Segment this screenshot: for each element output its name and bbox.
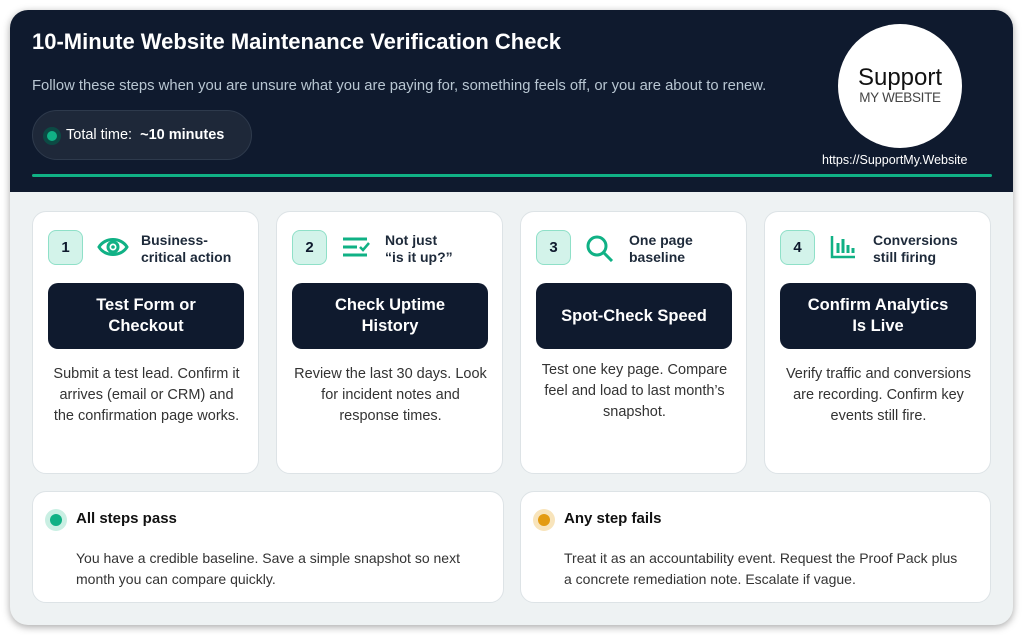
card 4: Is Live <box>852 317 904 335</box>
card 3: Spot-Check Speed <box>561 306 707 324</box>
card 3: baseline <box>629 249 685 265</box>
card 1: Submit a test lead. Confirm it <box>53 366 240 382</box>
card 2: “is it up?” <box>385 249 453 265</box>
panel: any step fails <box>520 491 991 603</box>
card 2: 2 <box>305 239 314 256</box>
card 4 <box>764 211 991 474</box>
subtitle: Follow these steps when you are unsure what you are paying for, something feels off, or you are about to renew. <box>32 78 766 94</box>
card 4: are recording. Confirm key <box>793 387 964 403</box>
url: https://SupportMy.Website <box>822 153 967 167</box>
card 1: arrives (email or CRM) and <box>59 387 234 403</box>
icon: bar chart <box>830 236 855 258</box>
card 3: feel and load to last month’s <box>544 383 725 399</box>
card 2: Not just <box>385 232 437 248</box>
card 1: the confirmation page works. <box>54 408 239 424</box>
total time pill: Total time: ~10 minutes <box>66 127 224 143</box>
icon: search <box>586 236 613 262</box>
card 1: critical action <box>141 249 231 265</box>
panel: all steps pass <box>32 491 504 603</box>
panel: any step fails: a concrete remediation note. Escalate if vague. <box>564 571 856 587</box>
logo <box>838 24 962 148</box>
card 3: snapshot. <box>603 404 666 420</box>
card 3: One page <box>629 232 693 248</box>
title: 10-Minute Website Maintenance Verification Check <box>32 29 561 54</box>
card 2: Review the last 30 days. Look <box>294 366 487 382</box>
card 2: for incident notes and <box>321 387 460 403</box>
card 4: still firing <box>873 249 936 265</box>
card 1: Checkout <box>108 317 184 335</box>
card 4: Conversions <box>873 232 958 248</box>
card 3 <box>520 211 747 474</box>
card 4: events still fire. <box>831 408 926 424</box>
icon: list check <box>343 238 370 256</box>
panel: any step fails: Treat it as an accountability event. Request the Proof Pack plus <box>564 550 957 566</box>
card 2: Check Uptime <box>335 296 445 314</box>
icon: eye <box>97 238 129 256</box>
card 4: Confirm Analytics <box>808 296 948 314</box>
card 2: History <box>362 317 418 335</box>
card 1: Test Form or <box>96 296 196 314</box>
total time pill <box>32 110 252 160</box>
card 1 <box>32 211 259 474</box>
card 4: 4 <box>793 239 802 256</box>
panel: all steps pass: You have a credible baseline. Save a simple snapshot so next <box>76 550 460 566</box>
logo: Support <box>858 64 942 91</box>
card 1: 1 <box>61 239 70 256</box>
panel: all steps pass: All steps pass <box>76 510 177 527</box>
panel: all steps pass: month you can compare quickly. <box>76 571 276 587</box>
card 4: Verify traffic and conversions <box>786 366 971 382</box>
card 2: response times. <box>339 408 442 424</box>
card 3: 3 <box>549 239 558 256</box>
card 2 <box>276 211 503 474</box>
card 3: Test one key page. Compare <box>542 362 727 378</box>
logo: MY WEBSITE <box>859 90 941 105</box>
card 1: Business- <box>141 232 208 248</box>
panel: any step fails: Any step fails <box>564 510 662 527</box>
header band <box>10 10 1013 192</box>
